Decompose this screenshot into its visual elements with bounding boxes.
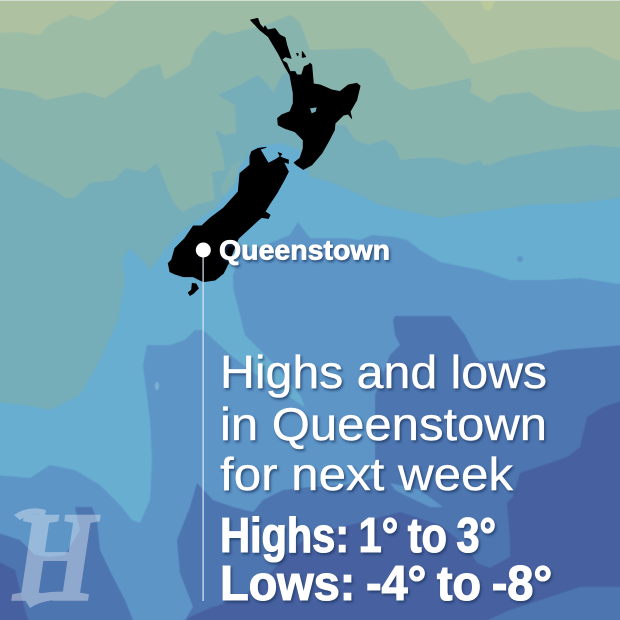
temperature ranges <box>220 509 552 611</box>
location pin line and dot <box>196 242 211 601</box>
North Island <box>251 18 360 169</box>
heading: for next week <box>220 448 514 500</box>
heading <box>220 346 547 500</box>
heading: in Queenstown <box>220 398 547 450</box>
Stewart Island <box>188 283 198 295</box>
heading: Highs and lows <box>220 346 547 398</box>
temperature ranges: Highs: 1° to 3° <box>220 509 496 563</box>
label: Queenstown: Queenstown <box>219 234 390 266</box>
South Island <box>168 147 288 282</box>
map: New Zealand <box>168 18 360 295</box>
top edge highlight <box>0 0 620 1</box>
temperature ranges: Lows: -4° to -8° <box>220 557 552 611</box>
